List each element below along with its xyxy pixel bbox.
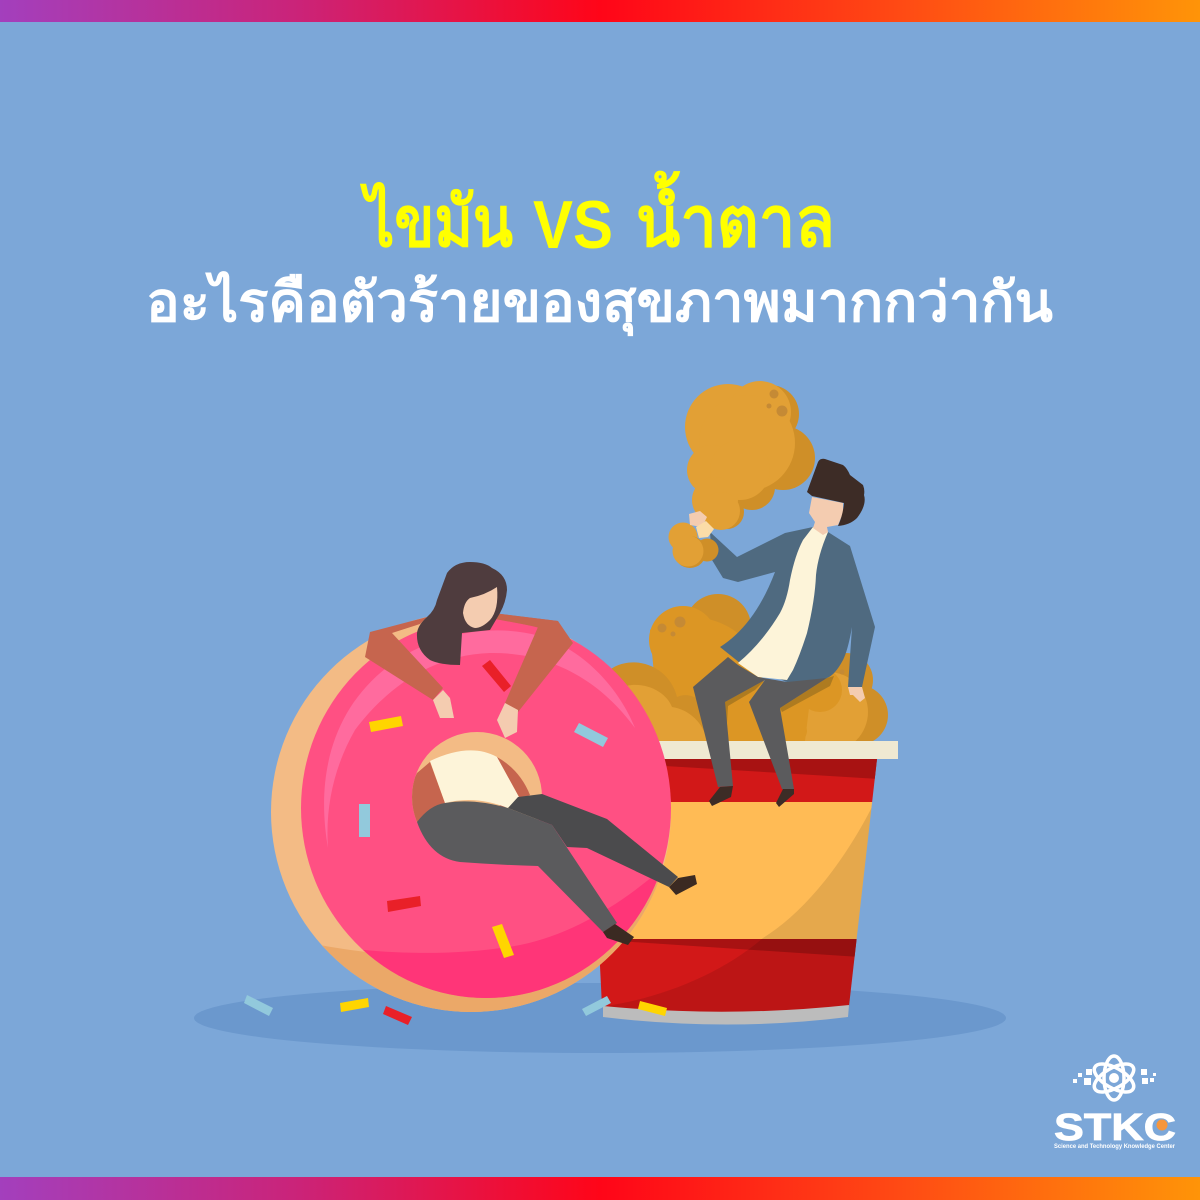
woman near leg (417, 801, 617, 932)
donut hole (412, 732, 542, 862)
pants shadow (722, 680, 765, 740)
man holding drumstick (668, 381, 875, 807)
woman torso in hole (405, 750, 530, 822)
other hand (848, 687, 865, 702)
right arm (493, 613, 573, 712)
ground shadow (194, 983, 1006, 1053)
shoe front (603, 924, 634, 945)
top gradient bar (0, 0, 1200, 22)
face (463, 587, 497, 628)
title line 1: fat: ไขมัน (359, 181, 513, 261)
left hand (433, 690, 454, 718)
bucket base rim (603, 1005, 849, 1024)
donut base shadow (322, 882, 658, 1012)
shirt (738, 527, 828, 680)
title line 2: อะไรคือตัวร้ายของสุขภาพมากกว่ากัน (146, 270, 1053, 337)
hair (417, 562, 507, 665)
hand (689, 511, 707, 527)
arm and jacket (710, 527, 875, 687)
pink icing (301, 618, 671, 998)
shoe left (709, 786, 733, 806)
icing dark lower band (362, 878, 657, 998)
donut with woman (271, 562, 700, 1020)
shoe back (669, 875, 697, 895)
jacket collar behind (493, 613, 558, 628)
bottom gradient bar (0, 1177, 1200, 1200)
donut base (271, 612, 671, 1012)
title (146, 170, 1053, 337)
title line 1: VS: VS (533, 187, 613, 263)
icing highlight (324, 630, 635, 848)
logo tagline: Science and Technology Knowledge Center (1054, 1144, 1176, 1150)
bucket body (600, 759, 877, 1012)
logo wordmark: STKC (1054, 1107, 1176, 1149)
woman far leg (508, 794, 678, 887)
chicken pile (600, 594, 888, 752)
drumstick bone end (668, 522, 718, 568)
drumstick (685, 381, 815, 530)
shoe right (776, 789, 794, 807)
sprinkles (244, 660, 667, 1025)
logo atom icon (1073, 1056, 1156, 1100)
cuff (696, 521, 714, 538)
pants shadow right (780, 676, 834, 712)
title line 1: sugar: น้ำตาล (636, 170, 835, 261)
fried chicken bucket with man (590, 594, 898, 1030)
hair (807, 459, 865, 526)
head (809, 497, 843, 535)
logo dot (1156, 1120, 1168, 1130)
right hand (497, 703, 518, 738)
pants (693, 657, 827, 789)
logo: STKC (1054, 1056, 1176, 1150)
bucket lid (640, 741, 898, 759)
left arm (365, 617, 443, 700)
